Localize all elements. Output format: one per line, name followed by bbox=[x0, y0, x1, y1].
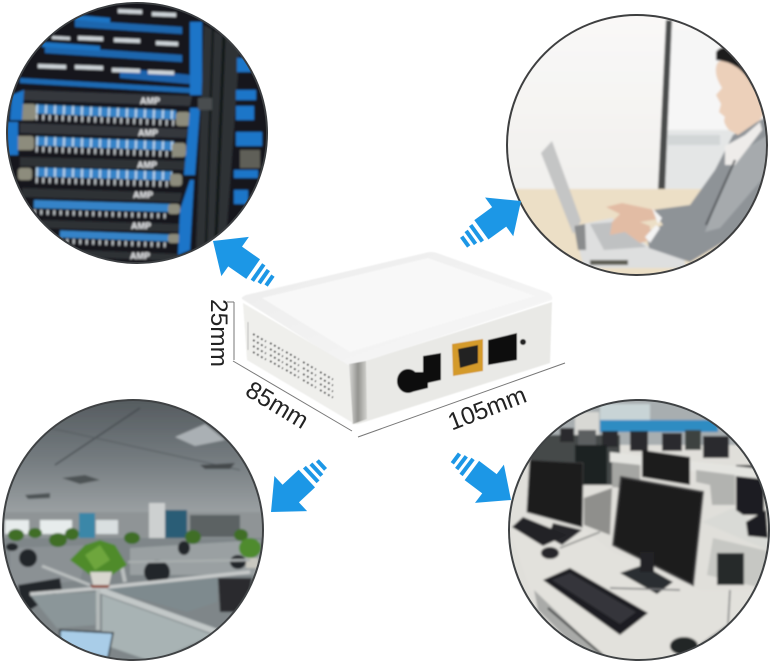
fiber connector bbox=[397, 353, 441, 393]
ceiling details bbox=[25, 408, 240, 499]
AMP cable manager bars: AMP bbox=[130, 251, 150, 261]
bundle end clamps bbox=[14, 104, 190, 243]
AMP cable manager bars bbox=[20, 90, 192, 261]
table bbox=[516, 187, 722, 274]
white pot on right bbox=[246, 558, 258, 568]
main keyboard bbox=[543, 568, 648, 635]
arrow: to computer lab bbox=[440, 438, 525, 519]
panel: woman using laptop photo circle bbox=[500, 10, 773, 280]
background plants bbox=[8, 528, 261, 558]
device rounded corner bbox=[349, 361, 367, 424]
middle monitor bbox=[642, 450, 690, 485]
partitions bbox=[102, 595, 213, 662]
laptop bbox=[60, 630, 113, 658]
woman: neck and face bbox=[716, 60, 766, 135]
AMP cable manager bars: AMP bbox=[140, 96, 160, 106]
window frame bbox=[658, 20, 672, 190]
dimension: 25mm: 25mm bbox=[205, 299, 232, 367]
device top inset panel bbox=[262, 258, 535, 352]
window view bbox=[662, 30, 767, 195]
blue cable bundles bbox=[34, 109, 176, 245]
rack top patch rows bbox=[20, 9, 190, 93]
dimension: 85mm: 85mm bbox=[241, 376, 313, 435]
potted plant bbox=[70, 540, 127, 588]
power socket bbox=[488, 333, 517, 365]
arrow: to server rack bbox=[199, 221, 285, 301]
AMP cable manager bars: AMP bbox=[137, 160, 157, 170]
panel: server rack photo circle bbox=[0, 0, 273, 266]
far wall and windows bbox=[0, 512, 273, 540]
device left face bbox=[243, 303, 353, 423]
panel: open-plan office photo circle bbox=[0, 395, 273, 663]
left monitor bbox=[527, 460, 583, 527]
vertical rack post bbox=[196, 25, 240, 250]
AMP cable manager bars: AMP bbox=[138, 128, 158, 138]
laptop bbox=[541, 141, 686, 268]
right rack cables bbox=[234, 58, 262, 204]
reset button bbox=[520, 339, 526, 345]
mice and cables bbox=[541, 547, 559, 559]
arrow: to laptop user bbox=[449, 182, 535, 262]
dimension: 105mm bbox=[358, 363, 565, 437]
left keyboard bbox=[511, 516, 556, 548]
dimension: 85mm bbox=[233, 361, 352, 435]
AMP cable manager bars: AMP bbox=[133, 190, 153, 200]
panel: computer lab photo circle bbox=[500, 395, 773, 664]
device top face bbox=[242, 252, 552, 366]
right desk bbox=[735, 509, 744, 516]
blue edge cables bbox=[7, 22, 202, 255]
back wall bbox=[550, 401, 736, 446]
woman: hands bbox=[606, 203, 658, 243]
device: white network box bbox=[242, 252, 552, 424]
back desks bbox=[610, 452, 770, 480]
device right face bbox=[350, 302, 552, 424]
cubicle floor bbox=[0, 538, 273, 663]
device vents bbox=[253, 334, 333, 398]
woman: hair bbox=[714, 46, 753, 89]
main monitor bbox=[613, 477, 703, 585]
front desk bbox=[510, 530, 760, 664]
woman: jacket bbox=[646, 115, 772, 262]
heads bbox=[6, 541, 246, 610]
back monitors bbox=[560, 428, 764, 515]
AMP cable manager bars: AMP bbox=[131, 221, 151, 231]
dimension: 105mm: 105mm bbox=[444, 382, 530, 436]
arrow: to office bbox=[255, 446, 339, 530]
ethernet port bbox=[452, 339, 483, 376]
